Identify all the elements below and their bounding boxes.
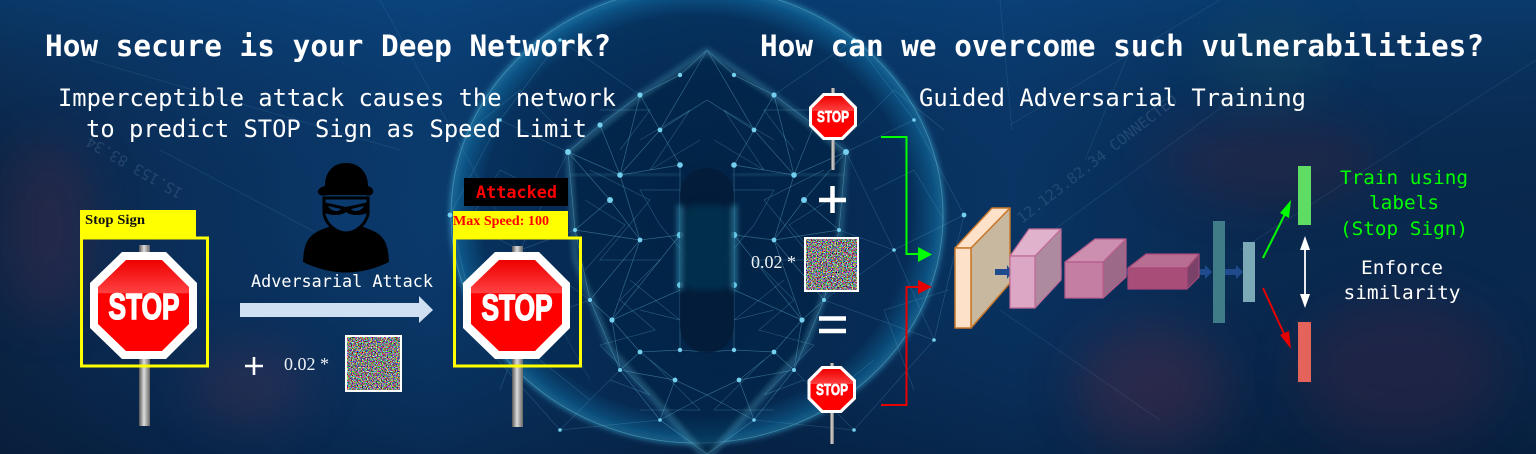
heading: right subtitle: Guided Adversarial Training bbox=[919, 84, 1306, 112]
text: noise coefficient: 0.02 * bbox=[284, 354, 329, 374]
background with network shield: 12.123.82.34 CONNECTED bbox=[1013, 91, 1181, 227]
heading: left title: How secure is your Deep Network? bbox=[45, 29, 611, 63]
label: max speed tag bbox=[453, 211, 568, 239]
arrow: attack bbox=[240, 296, 433, 323]
plus sign bbox=[245, 357, 263, 375]
bounding box with sign: STOP bbox=[482, 287, 552, 328]
arrow: similarity bbox=[1300, 236, 1310, 308]
text: train using labels: (Stop Sign) bbox=[1340, 218, 1468, 240]
label: stop sign tag: Stop Sign bbox=[85, 212, 146, 227]
icon: small stop sign bottom: STOP bbox=[816, 382, 848, 399]
layer 1 bbox=[955, 208, 1010, 328]
plus sign bbox=[819, 186, 846, 213]
bounding box with sign bbox=[454, 238, 580, 427]
heading: left subtitle: to predict STOP Sign as Speed Limit bbox=[86, 115, 587, 143]
layer 2 bbox=[1010, 229, 1061, 308]
output bar: green bbox=[1298, 166, 1311, 225]
text: train using labels: labels bbox=[1369, 192, 1439, 214]
panel: clean stop sign bbox=[80, 210, 208, 426]
neural network diagram bbox=[955, 208, 1255, 328]
icon: small stop sign top: STOP bbox=[817, 109, 849, 126]
output bar: red bbox=[1298, 322, 1311, 382]
label: adversarial attack: Adversarial Attack bbox=[251, 272, 433, 291]
arrow: red output bbox=[1263, 288, 1291, 349]
arrow: red input bbox=[881, 280, 932, 405]
label: attacked: Attacked bbox=[476, 183, 557, 202]
label: attacked bbox=[464, 178, 568, 206]
fully connected bars bbox=[1213, 221, 1225, 323]
text: enforce similarity bbox=[1344, 257, 1460, 304]
text: train using labels: Train using bbox=[1340, 167, 1468, 189]
panel: attacked stop sign bbox=[453, 178, 580, 427]
layer 3 bbox=[1065, 239, 1126, 298]
equals sign bbox=[819, 318, 846, 331]
text: noise coefficient: 0.02 * bbox=[751, 252, 796, 272]
bounding box with sign bbox=[82, 238, 208, 426]
bounding box with sign: STOP bbox=[108, 286, 180, 327]
icon: small stop sign bottom bbox=[808, 363, 856, 444]
label: stop sign tag bbox=[80, 210, 196, 238]
icon: small stop sign top bbox=[809, 88, 857, 170]
text: train using labels bbox=[1340, 167, 1468, 240]
noise image bbox=[345, 335, 402, 392]
label: max speed tag: Max Speed: 100 bbox=[453, 213, 549, 228]
connector arrows bbox=[995, 265, 1243, 279]
heading: right title: How can we overcome such vulnerabilities? bbox=[760, 29, 1484, 63]
heading: left subtitle bbox=[58, 84, 617, 143]
layer 4 bbox=[1128, 254, 1199, 289]
heading: left subtitle: Imperceptible attack causes the network bbox=[58, 84, 617, 112]
background with network shield: 1S.153 83.34 bbox=[83, 132, 186, 202]
text: enforce similarity: similarity bbox=[1344, 282, 1460, 304]
arrow: green output bbox=[1263, 200, 1291, 258]
icon: hooded attacker bbox=[303, 163, 389, 272]
arrow: green input bbox=[881, 137, 932, 262]
text: enforce similarity: Enforce bbox=[1361, 257, 1443, 279]
noise image bbox=[804, 237, 859, 292]
